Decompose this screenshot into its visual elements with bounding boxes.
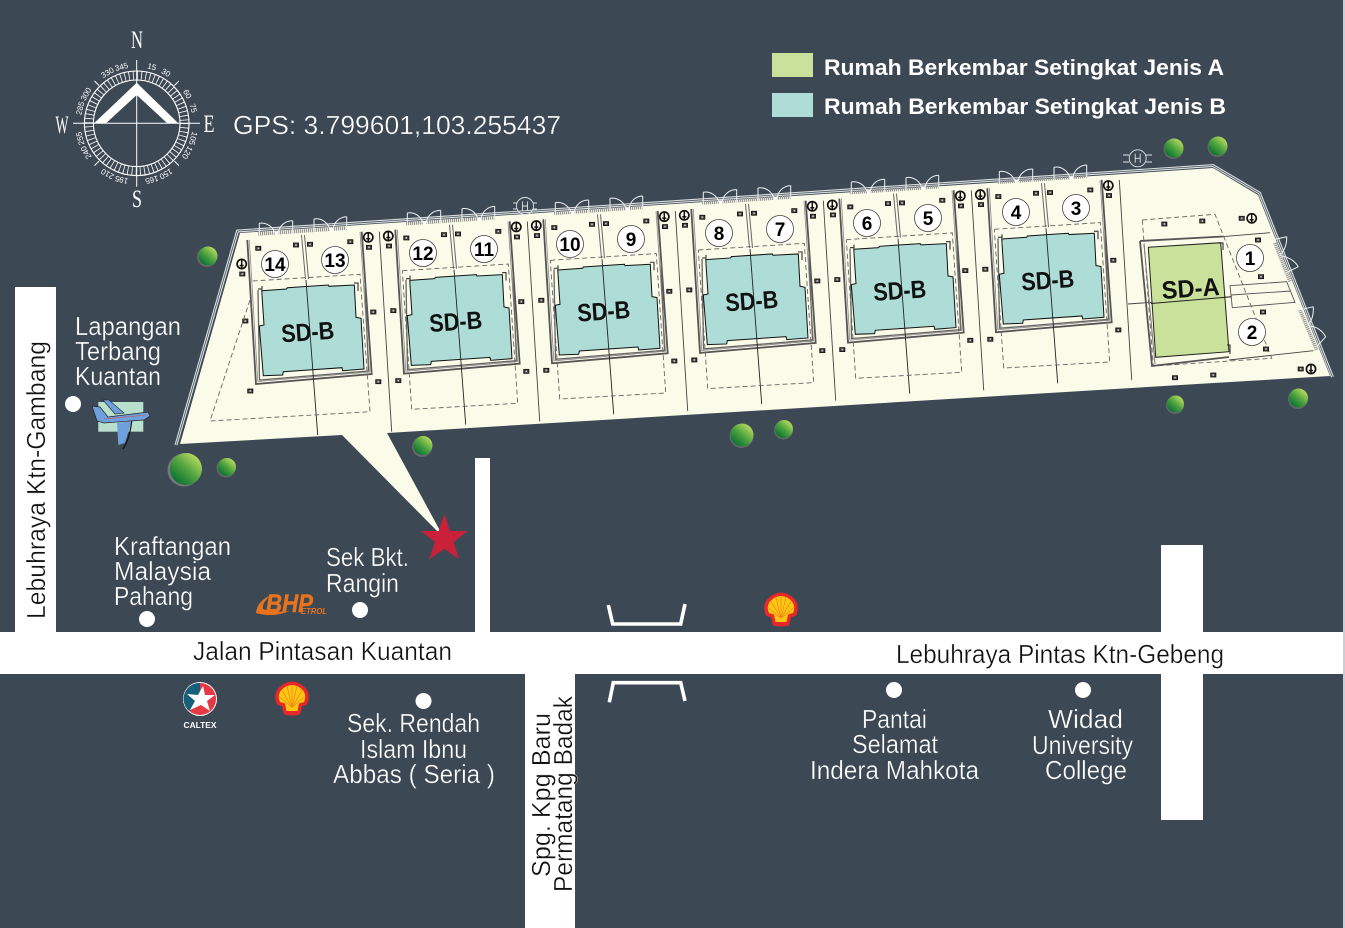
H marker east bbox=[1123, 150, 1152, 167]
legend bbox=[772, 53, 1226, 119]
icon: Shell station south bbox=[275, 682, 309, 716]
compass: 105 bbox=[187, 131, 199, 147]
icon: BHP Petrol: BHP bbox=[266, 590, 313, 618]
legend: Rumah Berkembar Setingkat Jenis A bbox=[824, 55, 1224, 80]
compass: 60 bbox=[181, 88, 194, 101]
unit 8 and 7: 8 bbox=[714, 224, 724, 245]
label: Pantai Selamat Indera Mahkota: Pantai bbox=[862, 704, 927, 734]
unit 6 and 5: SD-B bbox=[872, 275, 927, 307]
unit 14 and 13 bbox=[210, 217, 392, 435]
unit 1 and 2: 2 bbox=[1247, 323, 1257, 344]
compass: 75 bbox=[188, 103, 199, 114]
unit 4 and 3: SD-B bbox=[1020, 265, 1075, 297]
label: Sek. Rendah Islam Ibnu Abbas bbox=[333, 708, 495, 789]
unit 6 and 5 bbox=[828, 175, 984, 394]
label: Sek. Rendah Islam Ibnu Abbas: Abbas ( Seria ) bbox=[333, 759, 495, 789]
compass: 345 bbox=[114, 61, 130, 73]
unit 4 and 3: 3 bbox=[1071, 199, 1081, 220]
road label: Spg. Kpg Baru Permatang Badak: Spg. Kpg Baru bbox=[526, 713, 556, 877]
unit 1 and 2: SD-A bbox=[1161, 273, 1220, 305]
unit 14 and 13: 14 bbox=[264, 255, 286, 276]
compass: 15 bbox=[146, 61, 158, 73]
unit 12 and 11 bbox=[384, 206, 540, 425]
H marker west bbox=[513, 198, 537, 214]
compass: 255 bbox=[74, 130, 86, 146]
site boundary wall bbox=[176, 166, 1332, 445]
unit 8 and 7: SD-B bbox=[724, 286, 779, 317]
compass: 150 bbox=[157, 167, 174, 181]
road label: Jalan Pintasan Kuantan: Jalan Pintasan Kuantan bbox=[193, 636, 452, 666]
compass: 120 bbox=[180, 144, 194, 161]
unit 12 and 11: 11 bbox=[474, 240, 494, 261]
compass: E bbox=[204, 111, 214, 138]
icon: airport plane bbox=[92, 400, 150, 449]
label: Lapangan Terbang Kuantan bbox=[75, 311, 181, 391]
road label: Lebuhraya Ktn-Gambang: Lebuhraya Ktn-Gambang bbox=[21, 341, 51, 619]
compass: 330 bbox=[100, 65, 116, 80]
unit 10 and 9: 9 bbox=[626, 230, 636, 251]
label: Sek. Rendah Islam Ibnu Abbas: Sek. Rendah bbox=[347, 708, 480, 738]
label: Widad University College: College bbox=[1045, 755, 1127, 785]
star: site location bbox=[421, 514, 468, 559]
unit 12 and 11: 12 bbox=[412, 244, 434, 265]
compass: W bbox=[56, 112, 69, 139]
compass: 165 bbox=[144, 174, 159, 186]
label: Sek Bkt. Rangin: Sek Bkt. bbox=[326, 542, 409, 572]
roads bbox=[0, 287, 1343, 928]
icon: Caltex bbox=[183, 682, 217, 730]
compass: 300 bbox=[79, 86, 94, 102]
label: Sek. Rendah Islam Ibnu Abbas: Islam Ibnu bbox=[360, 734, 467, 764]
unit 14 and 13: 13 bbox=[324, 251, 346, 272]
unit 10 and 9: SD-B bbox=[576, 296, 631, 328]
road label: Spg. Kpg Baru Permatang Badak bbox=[526, 695, 578, 892]
road label: Lebuhraya Pintas Ktn-Gebeng: Lebuhraya Pintas Ktn-Gebeng bbox=[896, 639, 1224, 669]
unit 8 and 7: 7 bbox=[775, 220, 785, 241]
label: Sek Bkt. Rangin: Rangin bbox=[326, 568, 399, 598]
icon: Caltex: CALTEX bbox=[184, 720, 217, 730]
unit 6 and 5: 5 bbox=[923, 209, 934, 230]
compass: 240 bbox=[79, 144, 93, 160]
unit 8 and 7 bbox=[680, 186, 836, 404]
compass: 30 bbox=[160, 67, 172, 79]
label: Pantai Selamat Indera Mahkota: Selamat bbox=[852, 729, 939, 759]
site plan ground with callout bbox=[180, 168, 1330, 538]
compass: N bbox=[131, 27, 143, 54]
unit 4 and 3: 4 bbox=[1011, 203, 1022, 224]
unit 1 and 2: 1 bbox=[1245, 249, 1256, 270]
label: Kraftangan Malaysia Pahang bbox=[114, 531, 231, 611]
label: Widad University College: University bbox=[1032, 730, 1133, 760]
unit 10 and 9 bbox=[532, 196, 688, 414]
unit 14 and 13: SD-B bbox=[280, 317, 335, 348]
unit 1 and 2 bbox=[1128, 214, 1326, 380]
label: Lapangan Terbang Kuantan: Terbang bbox=[75, 336, 161, 366]
trees bbox=[168, 136, 1308, 486]
road label: Spg. Kpg Baru Permatang Badak: Permatang Badak bbox=[548, 695, 578, 892]
compass: 210 bbox=[99, 166, 116, 181]
icon: BHP Petrol: ETROL bbox=[301, 607, 327, 616]
location dots bbox=[65, 396, 1091, 709]
label: Widad University College bbox=[1032, 704, 1133, 785]
label: Lapangan Terbang Kuantan: Lapangan bbox=[75, 311, 181, 341]
label: Lapangan Terbang Kuantan: Kuantan bbox=[75, 361, 161, 391]
legend: Rumah Berkembar Setingkat Jenis B bbox=[824, 94, 1226, 119]
compass: 285 bbox=[74, 100, 87, 116]
label: Sek Bkt. Rangin bbox=[326, 542, 409, 598]
unit 4 and 3 bbox=[976, 165, 1132, 383]
label: Pantai Selamat Indera Mahkota bbox=[810, 704, 980, 785]
compass: 195 bbox=[113, 173, 129, 186]
compass: S bbox=[132, 186, 142, 213]
unit 6 and 5: 6 bbox=[862, 214, 872, 235]
road junction brackets bbox=[608, 604, 685, 702]
label: Pantai Selamat Indera Mahkota: Indera Mahkota bbox=[810, 755, 980, 785]
label: Kraftangan Malaysia Pahang: Kraftangan bbox=[114, 531, 231, 561]
label: Kraftangan Malaysia Pahang: Pahang bbox=[114, 581, 193, 611]
GPS coordinates: GPS: 3.799601,103.255437 bbox=[233, 110, 561, 140]
unit 10 and 9: 10 bbox=[559, 235, 581, 256]
label: Widad University College: Widad bbox=[1048, 704, 1123, 734]
unit 12 and 11: SD-B bbox=[428, 306, 483, 338]
icon: Shell station north bbox=[764, 592, 798, 626]
compass bbox=[56, 27, 214, 213]
right edge strip bbox=[1343, 0, 1345, 928]
label: Kraftangan Malaysia Pahang: Malaysia bbox=[114, 556, 212, 586]
